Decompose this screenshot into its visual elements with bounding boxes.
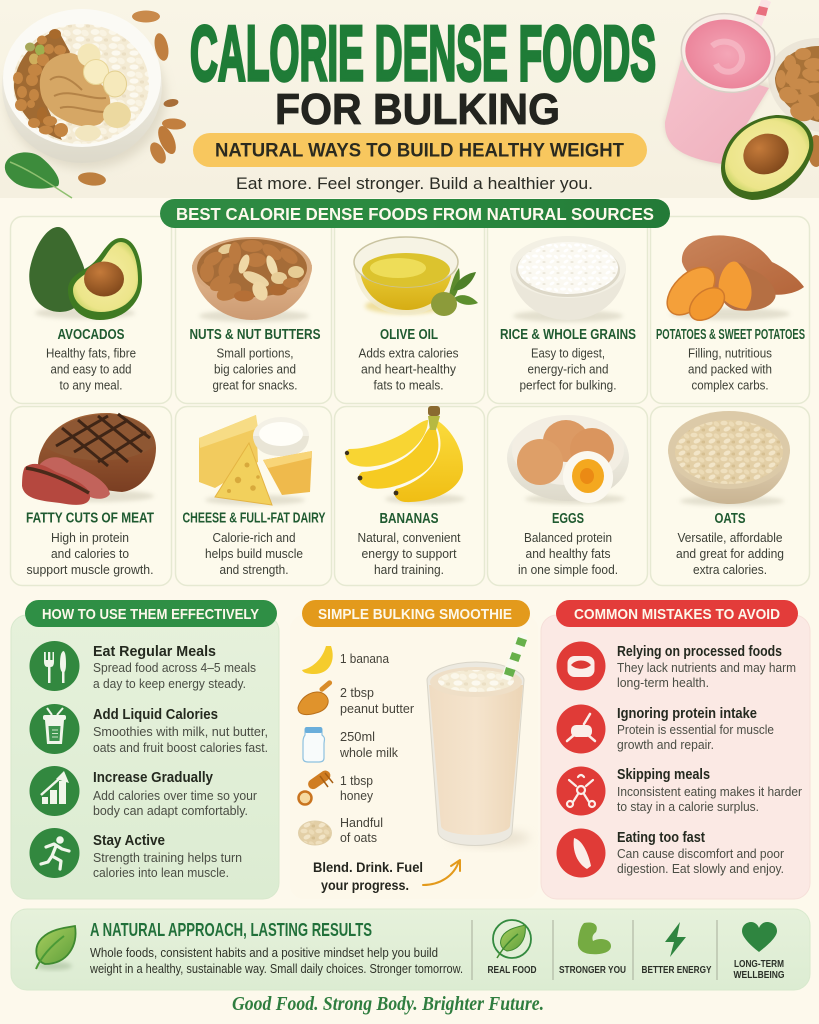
badge: stronger you: [559, 922, 626, 976]
icon: oats pile: [298, 821, 332, 845]
ingredient text: honey: [340, 789, 374, 803]
icon: leaf: [36, 926, 76, 970]
icon: bowl of oats: [668, 411, 790, 506]
badge: better energy: [642, 922, 712, 976]
icon: bowl of nuts: [192, 237, 312, 322]
icon: loose almonds left: [77, 10, 186, 187]
item text: oats and fruit boost calories fast.: [93, 741, 268, 755]
description: Calorie-rich and: [212, 530, 296, 545]
arrow: [423, 860, 460, 885]
description: to any meal.: [60, 378, 122, 392]
subtitle pill: NATURAL WAYS TO BUILD HEALTHY WEIGHT: [215, 140, 624, 162]
icon: almond bowl: [768, 38, 819, 132]
icon: leaf in circle: [493, 920, 531, 958]
badge: long-term wellbeing: [734, 922, 784, 981]
icon: bowl of olive oil: [354, 237, 478, 316]
item text: Strength training helps turn: [93, 851, 242, 865]
description: energy-rich and: [528, 362, 608, 376]
heading: FATTY CUTS OF MEAT: [26, 510, 154, 526]
description: [520, 346, 616, 392]
item text: calories into lean muscle.: [93, 866, 229, 880]
ingredient text: 2 tbsp: [340, 686, 374, 700]
item text: Skipping meals: [617, 767, 710, 783]
card: potatoes: [650, 216, 810, 404]
description: [205, 530, 303, 577]
heading: OLIVE OIL: [380, 327, 438, 343]
card: bananas: [334, 406, 484, 586]
description: great for snacks.: [212, 378, 298, 392]
description: Easy to digest,: [531, 346, 605, 360]
icon: eating fast: [556, 828, 606, 878]
item text: They lack nutrients and may harm: [617, 661, 796, 675]
item: relying on processed foods: [556, 642, 796, 690]
description: Balanced protein: [524, 530, 612, 545]
ingredient text: Handful: [340, 816, 383, 830]
heading: NUTS & NUT BUTTERS: [190, 327, 321, 343]
item text: [93, 770, 257, 818]
icon: sweet potatoes: [658, 235, 804, 327]
ingredient text: 1 tbsp: [340, 774, 373, 788]
description: and healthy fats: [526, 546, 611, 561]
panel: natural approach banner: [11, 909, 810, 990]
label: REAL FOOD: [488, 964, 537, 976]
description: [358, 346, 459, 392]
item text: [617, 706, 774, 752]
subtitle pill: [193, 133, 647, 167]
description: [46, 346, 136, 392]
item text: [93, 833, 242, 880]
ingredient text: of oats: [340, 831, 377, 845]
description: and calories to: [51, 546, 129, 561]
icon: avocado half top: [721, 115, 819, 200]
item text: [617, 767, 802, 814]
description: and heart-healthy: [361, 362, 456, 376]
icon: cheese and dairy: [199, 415, 312, 505]
icon: oatmeal bowl with peanut butter: [2, 9, 166, 169]
label: LONG-TERM: [734, 958, 784, 970]
ingredient text: 1 banana: [340, 652, 389, 666]
ingredient text: 250ml: [340, 730, 375, 744]
description: helps build muscle: [205, 546, 303, 561]
label: STRONGER YOU: [559, 964, 626, 976]
card: olive oil: [334, 216, 484, 404]
item text: Relying on processed foods: [617, 644, 782, 660]
header band: [0, 0, 819, 198]
panel: food cards: [10, 216, 810, 586]
item: increase gradually: [30, 766, 257, 818]
heading: AVOCADOS: [58, 327, 125, 343]
description: extra calories.: [693, 562, 767, 577]
label: WELLBEING: [734, 969, 784, 981]
heading pill: [25, 600, 277, 627]
item: ignoring protein intake: [556, 704, 774, 754]
card: avocados: [10, 216, 172, 404]
heading pill: SIMPLE BULKING SMOOTHIE: [318, 606, 512, 623]
item text: digestion. Eat slowly and enjoy.: [617, 862, 784, 876]
icon: banana: [302, 646, 333, 674]
description: [212, 346, 298, 392]
description: [676, 530, 784, 577]
heading: CHEESE & FULL-FAT DAIRY: [182, 510, 326, 526]
icon: peanut butter scoop: [298, 679, 333, 715]
heading: EGGS: [552, 511, 584, 527]
icon: bananas: [345, 406, 465, 504]
description: energy to support: [362, 546, 457, 561]
item: add liquid calories: [30, 704, 268, 755]
item: eating too fast: [556, 828, 784, 878]
item text: to stay in a calorie surplus.: [617, 800, 759, 814]
item text: Spread food across 4–5 meals: [93, 661, 256, 675]
item text: long-term health.: [617, 676, 709, 690]
ingredient text: [340, 816, 383, 845]
description: and strength.: [220, 562, 288, 577]
heading pill: [556, 600, 798, 627]
item text: [93, 644, 256, 691]
icon: rising bars: [30, 766, 80, 816]
item text: Can cause discomfort and poor: [617, 847, 784, 861]
description: perfect for bulking.: [520, 378, 616, 392]
panel: common mistakes to avoid: [541, 600, 810, 899]
card: nuts: [176, 216, 332, 404]
icon: pink smoothie glass: [664, 0, 782, 166]
icon: honey dipper: [298, 769, 333, 804]
ingredient text: [340, 686, 414, 716]
banner heading: A NATURAL APPROACH, LASTING RESULTS: [90, 920, 372, 940]
ingredient text: [340, 774, 374, 803]
icon: protein dish: [556, 704, 606, 754]
icon: shake cup: [30, 704, 80, 754]
description: Natural, convenient: [358, 530, 461, 545]
item text: [93, 707, 268, 755]
icon: eggs in bowl: [507, 415, 629, 509]
icon: lightning bolt: [665, 922, 686, 957]
description: fats to meals.: [374, 378, 444, 392]
heading pill: [302, 600, 530, 627]
icon: bowl of rice: [510, 236, 626, 322]
heading: RICE & WHOLE GRAINS: [500, 327, 636, 343]
item text: Add calories over time so your: [93, 789, 257, 803]
icon: grilled steak: [22, 413, 156, 505]
banner text: Whole foods, consistent habits and a positive mindset help you build: [90, 945, 438, 960]
icon: flexed arm: [578, 922, 611, 954]
card: meat: [10, 406, 172, 586]
item text: Smoothies with milk, nut butter,: [93, 725, 268, 739]
item text: Protein is essential for muscle: [617, 723, 774, 737]
description: Versatile, affordable: [678, 530, 782, 545]
ingredient text: [339, 730, 399, 760]
item: stay active: [30, 828, 242, 880]
section heading pill: [160, 199, 670, 228]
item text: a day to keep energy steady.: [93, 677, 246, 691]
description: [688, 346, 772, 392]
closing slogan: Good Food. Strong Body. Brighter Future.: [232, 993, 544, 1015]
card: cheese: [176, 406, 332, 586]
ingredient text: peanut butter: [340, 702, 414, 716]
item text: Eat Regular Meals: [93, 644, 216, 660]
icon: runner: [30, 828, 80, 878]
item text: growth and repair.: [617, 738, 714, 752]
description: [518, 530, 618, 577]
description: Small portions,: [216, 346, 294, 360]
closing text: your progress.: [321, 877, 409, 893]
description: big calories and: [214, 362, 296, 376]
item text: Eating too fast: [617, 830, 705, 846]
ingredient text: whole milk: [339, 746, 399, 760]
item text: [617, 644, 796, 690]
description: support muscle growth.: [26, 562, 154, 577]
item text: body can adapt comfortably.: [93, 804, 248, 818]
label: [734, 958, 784, 981]
description: Adds extra calories: [358, 346, 459, 360]
item text: Increase Gradually: [93, 770, 213, 786]
card: oats: [650, 406, 810, 586]
badge: real food: [488, 920, 537, 976]
banner text: weight in a healthy, sustainable way. Small daily choices. Stronger tomorrow.: [89, 961, 463, 976]
icon: avocado: [29, 227, 142, 320]
description: Filling, nutritious: [688, 346, 772, 360]
item text: Add Liquid Calories: [93, 707, 218, 723]
description: [26, 530, 154, 577]
icon: smoothie glass: [427, 632, 530, 846]
description: in one simple food.: [518, 562, 618, 577]
heading pill: COMMON MISTAKES TO AVOID: [574, 606, 780, 623]
card: rice: [488, 216, 648, 404]
icon: milk bottle: [303, 727, 324, 762]
description: hard training.: [374, 562, 444, 577]
label: BETTER ENERGY: [642, 964, 712, 976]
description: and great for adding: [676, 546, 784, 561]
icon: spinach leaf: [5, 152, 72, 198]
item text: Inconsistent eating makes it harder: [617, 785, 802, 799]
tagline: Eat more. Feel stronger. Build a healthier you.: [236, 175, 593, 193]
heading: BANANAS: [380, 511, 439, 527]
item: skipping meals: [556, 766, 802, 816]
item text: Ignoring protein intake: [617, 706, 757, 722]
heading pill: HOW TO USE THEM EFFECTIVELY: [42, 606, 259, 623]
description: High in protein: [51, 530, 129, 545]
heading: OATS: [714, 511, 746, 527]
panel: how to use them effectively: [11, 600, 279, 899]
closing text: Blend. Drink. Fuel: [313, 859, 423, 875]
item text: [617, 830, 784, 876]
description: [358, 530, 461, 577]
icon: processed food: [556, 642, 606, 690]
icon: skipped meal: [556, 766, 606, 816]
item text: Stay Active: [93, 833, 165, 849]
description: Healthy fats, fibre: [46, 346, 136, 360]
title: [190, 9, 656, 134]
title line two: FOR BULKING: [275, 85, 560, 134]
banner text: [89, 945, 463, 976]
closing text: [313, 859, 423, 893]
panel: simple bulking smoothie: [290, 600, 538, 899]
icon: fork and knife: [30, 641, 80, 691]
description: and easy to add: [50, 362, 132, 376]
icon: heart: [742, 922, 777, 952]
item: eat regular meals: [30, 641, 256, 691]
description: complex carbs.: [692, 378, 768, 392]
card: eggs: [488, 406, 648, 586]
section heading pill: BEST CALORIE DENSE FOODS FROM NATURAL SOURCES: [176, 204, 654, 224]
description: and packed with: [688, 362, 772, 376]
